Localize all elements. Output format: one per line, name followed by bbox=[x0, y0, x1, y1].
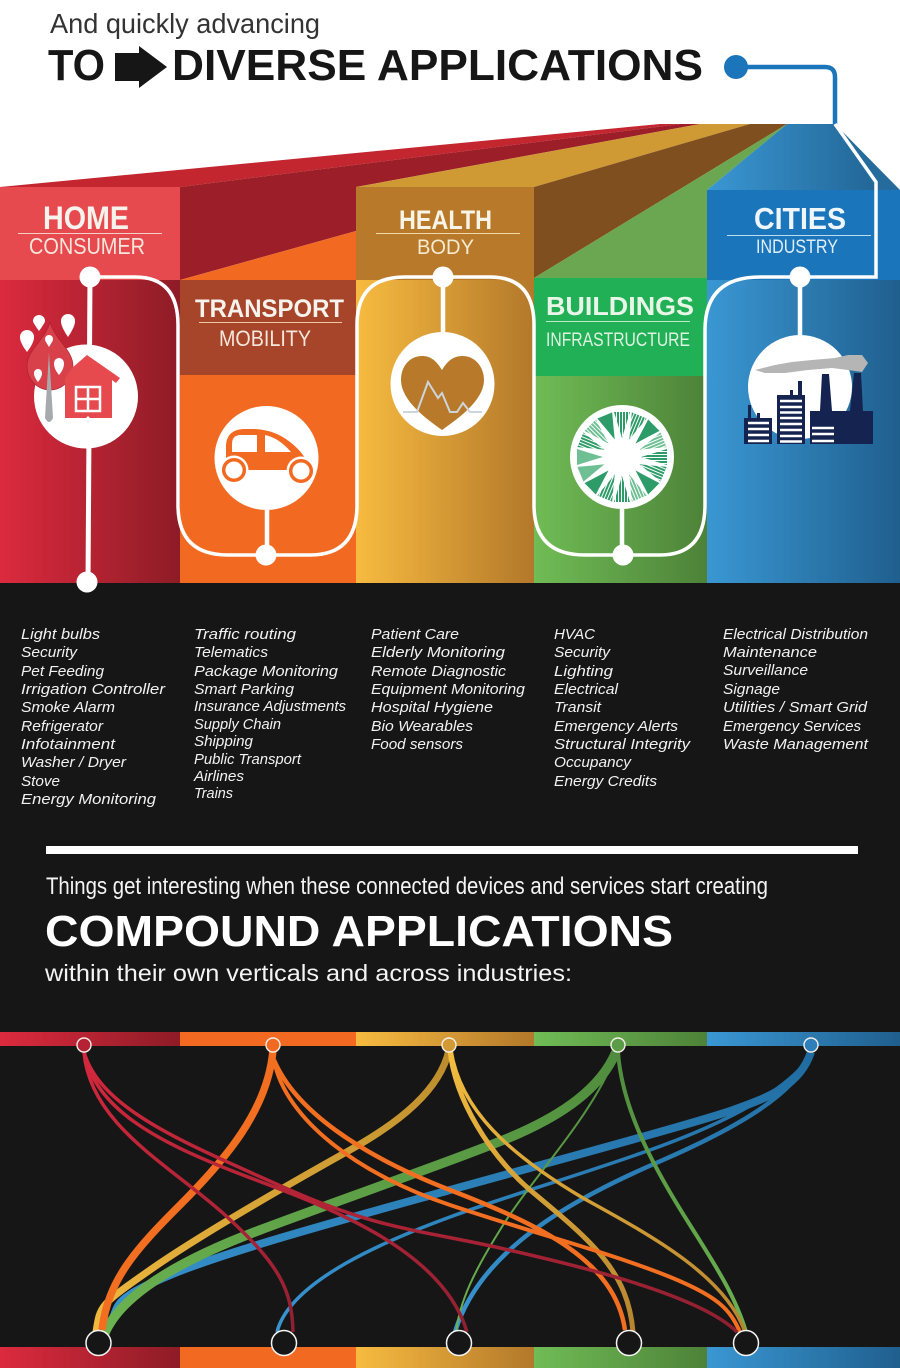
top nodes bbox=[77, 1038, 818, 1052]
list: transport applications bbox=[193, 626, 346, 802]
list: cities applications: Emergency Services bbox=[723, 718, 861, 735]
list: transport applications: Telematics bbox=[194, 644, 269, 661]
list: cities applications: Waste Management bbox=[723, 736, 869, 753]
list: cities applications: Electrical Distribution bbox=[723, 626, 868, 643]
top colour band bbox=[0, 1032, 900, 1046]
list: home applications: Energy Monitoring bbox=[21, 791, 157, 808]
list: cities applications: Surveillance bbox=[723, 662, 808, 679]
transport heading: TRANSPORT bbox=[195, 295, 344, 323]
black lower background bbox=[0, 583, 900, 1368]
list: buildings applications: Transit bbox=[554, 699, 602, 716]
bottom colour band bbox=[0, 1347, 900, 1368]
list: transport applications: Shipping bbox=[194, 733, 254, 750]
list: buildings applications: Energy Credits bbox=[554, 773, 658, 790]
panel: transport column bbox=[180, 280, 356, 583]
icon: transport node and car bbox=[214, 406, 318, 566]
title intro line: And quickly advancing bbox=[50, 8, 320, 39]
icon: health node and heart bbox=[390, 266, 494, 436]
home header box bbox=[0, 187, 180, 280]
health heading: HEALTH bbox=[399, 205, 492, 235]
list: home applications: Infotainment bbox=[21, 736, 116, 753]
health subheading: BODY bbox=[417, 236, 474, 259]
panel: home column bbox=[0, 187, 180, 583]
panel: cities column bbox=[707, 190, 900, 583]
title word: to: TO bbox=[48, 41, 105, 90]
main heading: COMPOUND APPLICATIONS bbox=[45, 907, 673, 956]
list: home applications: Light bulbs bbox=[21, 626, 101, 643]
icon: title arrow bbox=[115, 46, 167, 88]
intro sentence: Things get interesting when these connected devices and services start creating bbox=[46, 873, 768, 900]
curves from home bbox=[84, 1052, 737, 1332]
list: buildings applications bbox=[554, 626, 692, 790]
closing sentence: within their own verticals and across industries: bbox=[44, 960, 572, 986]
list: transport applications: Traffic routing bbox=[194, 626, 297, 643]
list: health applications: Remote Diagnostic bbox=[371, 663, 507, 680]
list: buildings applications: Occupancy bbox=[554, 754, 633, 771]
blue connector from title bbox=[724, 55, 835, 126]
bottom nodes bbox=[86, 1330, 758, 1356]
list: health applications: Patient Care bbox=[371, 626, 459, 643]
icon: home node and house bbox=[20, 266, 138, 592]
list: home applications: Washer / Dryer bbox=[21, 754, 127, 771]
list: buildings applications: Lighting bbox=[554, 663, 614, 680]
cities subheading: INDUSTRY bbox=[756, 236, 838, 258]
white connecting line bbox=[90, 124, 876, 555]
heading: compound applications bbox=[44, 873, 768, 986]
list: health applications: Equipment Monitoring bbox=[371, 681, 526, 698]
list: transport applications: Supply Chain bbox=[194, 716, 281, 733]
list: buildings applications: Electrical bbox=[554, 681, 619, 698]
panel: health column bbox=[356, 187, 534, 583]
buildings header box bbox=[534, 278, 707, 376]
chart: compound application curves bbox=[84, 1050, 811, 1335]
list: home applications: Smoke Alarm bbox=[21, 699, 115, 716]
list: health applications: Food sensors bbox=[371, 736, 463, 753]
buildings subheading: INFRASTRUCTURE bbox=[546, 329, 690, 351]
list: transport applications: Smart Parking bbox=[194, 681, 295, 698]
buildings heading: BUILDINGS bbox=[546, 291, 694, 321]
list: transport applications: Airlines bbox=[193, 768, 245, 785]
list: transport applications: Trains bbox=[194, 785, 233, 802]
list: home applications: Refrigerator bbox=[21, 718, 104, 735]
list: home applications: Stove bbox=[21, 773, 60, 790]
list: health applications: Elderly Monitoring bbox=[371, 644, 506, 661]
health header box bbox=[356, 187, 534, 280]
home heading: HOME bbox=[43, 200, 129, 236]
list: transport applications: Package Monitoring bbox=[194, 663, 339, 680]
list: transport applications: Insurance Adjustments bbox=[194, 698, 346, 715]
icon: cities node and factory bbox=[744, 266, 873, 444]
list: health applications: Bio Wearables bbox=[371, 718, 474, 735]
list: cities applications bbox=[723, 626, 869, 753]
panel: buildings column bbox=[534, 278, 707, 583]
perspective roof planes bbox=[0, 124, 900, 280]
curves from cities bbox=[110, 1052, 811, 1332]
list: buildings applications: HVAC bbox=[554, 626, 595, 643]
title main line: DIVERSE APPLICATIONS bbox=[172, 41, 703, 90]
transport subheading: MOBILITY bbox=[219, 326, 311, 351]
list: home applications: Pet Feeding bbox=[21, 663, 105, 680]
cities heading: CITIES bbox=[754, 201, 846, 236]
home subheading: CONSUMER bbox=[29, 233, 145, 259]
curves from transport bbox=[102, 1050, 740, 1332]
list: home applications bbox=[21, 626, 166, 808]
list: cities applications: Signage bbox=[723, 681, 780, 698]
list: health applications: Hospital Hygiene bbox=[371, 699, 493, 716]
list: health applications bbox=[371, 626, 526, 753]
list: buildings applications: Structural Integrity bbox=[554, 736, 692, 753]
list: buildings applications: Security bbox=[554, 644, 612, 661]
list: home applications: Irrigation Controller bbox=[21, 681, 166, 698]
cities header box bbox=[707, 190, 900, 280]
list: transport applications: Public Transport bbox=[194, 751, 302, 768]
list: cities applications: Utilities / Smart Grid bbox=[723, 699, 868, 716]
curves from health bbox=[96, 1050, 745, 1332]
curves from buildings bbox=[104, 1052, 746, 1335]
icon: buildings node and radial tree bbox=[570, 405, 674, 566]
transport header box bbox=[180, 280, 356, 375]
list: cities applications: Maintenance bbox=[723, 644, 817, 661]
title bbox=[48, 8, 703, 90]
list: home applications: Security bbox=[21, 644, 79, 661]
list: buildings applications: Emergency Alerts bbox=[554, 718, 679, 735]
